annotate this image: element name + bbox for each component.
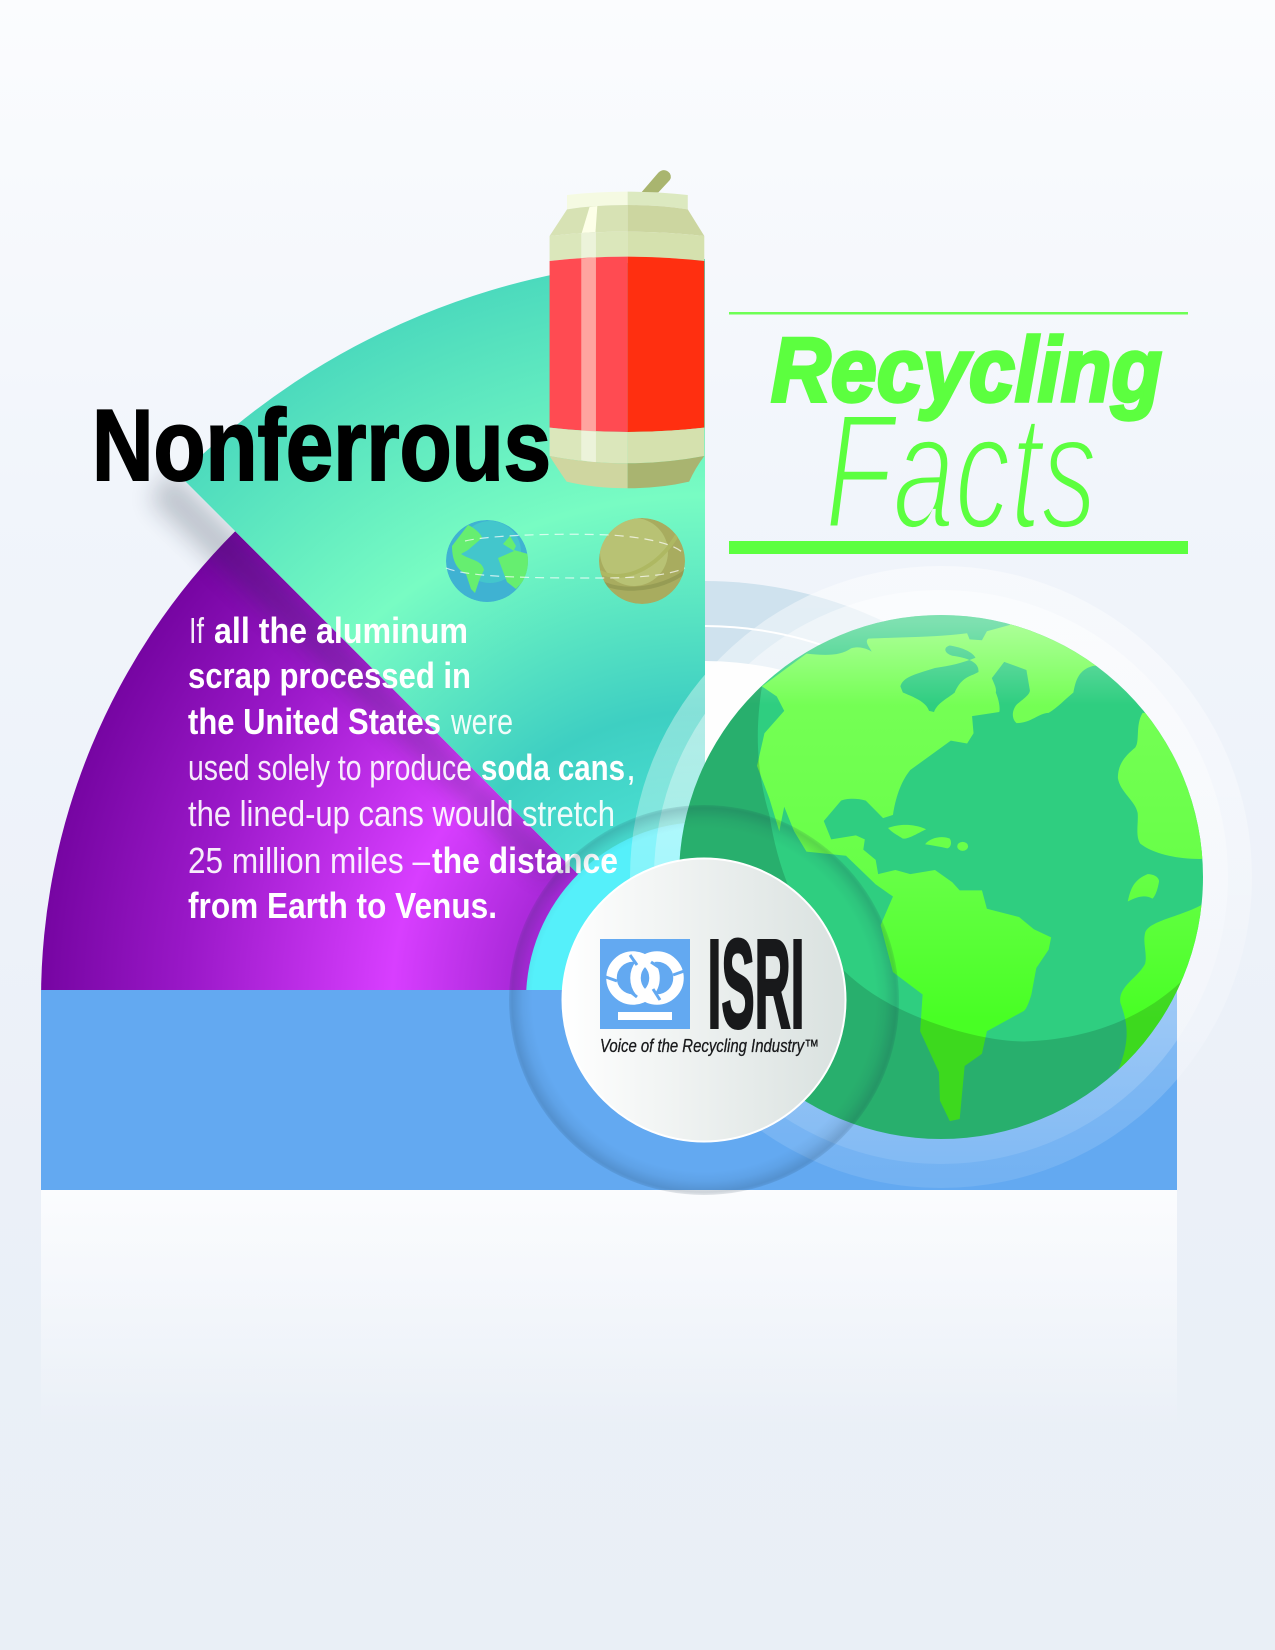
- icon: small venus: [599, 518, 692, 604]
- logo: ISRI badge: [562, 858, 846, 1142]
- body text: the United States: [188, 701, 441, 742]
- body text: ,: [626, 747, 636, 788]
- body text: If: [189, 610, 205, 651]
- body text: the lined-up cans would stretch: [188, 793, 615, 834]
- concentric arcs behind the earth: [705, 581, 883, 713]
- body text: scrap processed in: [188, 655, 471, 696]
- body text: the distance: [432, 840, 618, 881]
- teal sector: [180, 259, 705, 1000]
- title block: Recycling Facts: [729, 312, 1188, 563]
- dashed orbit lines between earth and venus: [446, 534, 685, 578]
- logo bubble ring: [509, 805, 899, 1195]
- icon: earth globe: [680, 615, 1203, 1139]
- logo: ISRI badge: Voice of the Recycling Industry™: [600, 1036, 819, 1056]
- logo: ISRI badge: ISRI: [708, 914, 804, 1054]
- body text: all the aluminum: [214, 610, 468, 651]
- body text: 25 million miles –: [188, 840, 430, 881]
- purple sector: [41, 531, 704, 1000]
- panel: white fading base below the blue band: [41, 1190, 1177, 1430]
- icon: small earth: [446, 520, 530, 602]
- cyan inner disc: [526, 823, 684, 990]
- shadow cast by the teal sector: [150, 470, 560, 880]
- title block: Recycling Facts: Facts: [825, 379, 1097, 563]
- icon: soda can: [550, 170, 704, 488]
- blue band: [41, 990, 1177, 1190]
- heading: Nonferrous: Nonferrous: [92, 390, 551, 502]
- body text: from Earth to Venus.: [188, 885, 497, 926]
- body text: used solely to produce: [188, 747, 472, 788]
- body text: soda cans: [481, 747, 625, 788]
- body text: [188, 610, 636, 926]
- title block: Recycling Facts: Recycling: [771, 320, 1162, 421]
- earth halo rings: [630, 566, 1252, 1188]
- body text: were: [450, 701, 513, 742]
